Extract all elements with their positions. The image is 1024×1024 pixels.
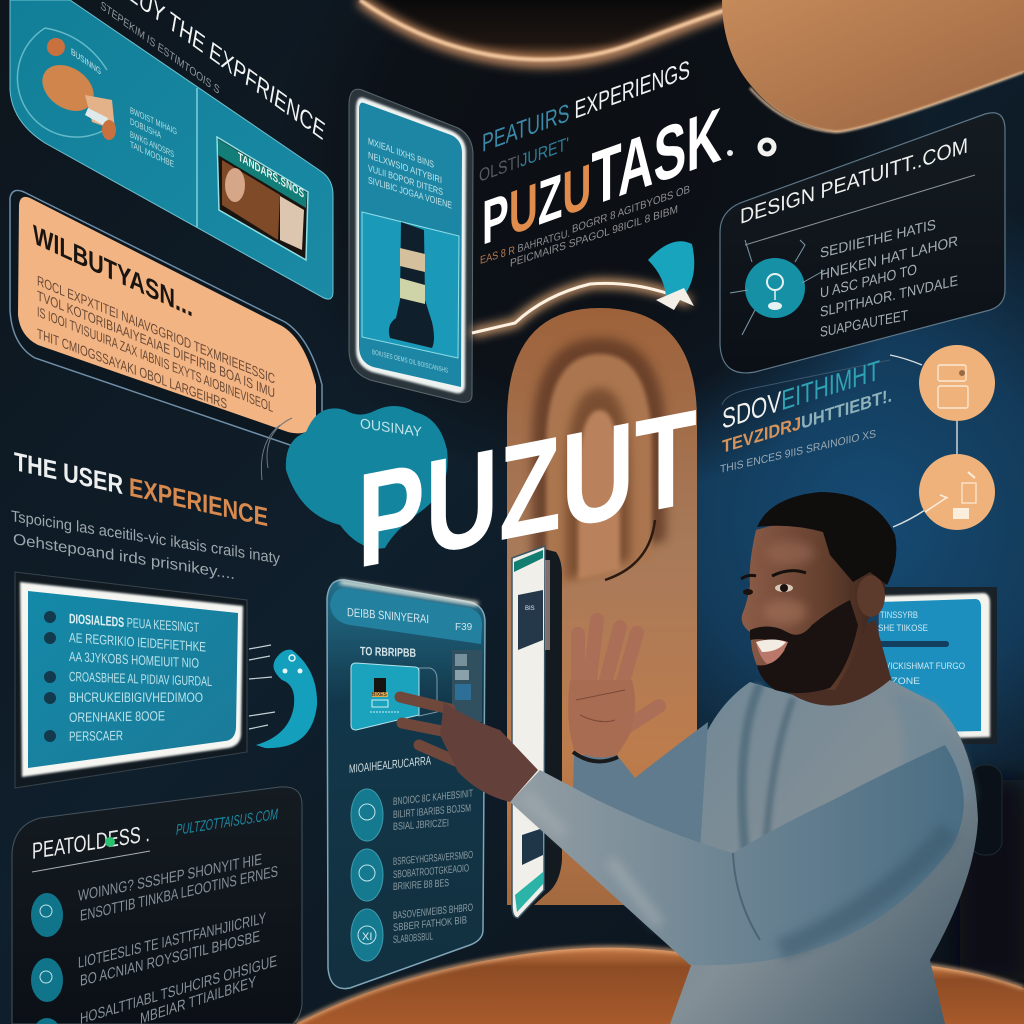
callout: sdov text block: TEVZIDRJUHTTIEBT!. [722, 384, 892, 457]
panel: features bottom card [12, 787, 302, 1024]
smile [756, 640, 788, 664]
icon: teal flag [648, 241, 694, 310]
heading: features experiences: OLSTIJURET' [479, 133, 569, 186]
ear [857, 575, 885, 617]
raised arm sleeve [573, 722, 708, 872]
card body: U ASC PAHO TO [820, 262, 917, 302]
tablet feature rows: BILIRT IBARIBS BOJSM [393, 802, 471, 821]
title subtext: EAS 8 R BAHRATGU. [480, 228, 570, 267]
icon: cards circle [919, 345, 995, 421]
pointing arm sleeve [510, 745, 964, 965]
screen text: RZONE [884, 676, 920, 687]
pointing hand [400, 697, 538, 802]
card text: MXIEAL IIXHS BINS [368, 136, 434, 171]
ring marker [760, 140, 774, 154]
icon: teal diagram [730, 240, 825, 335]
card rows: LIOTEESLIS TE IASTTFANHJIICRILY [78, 910, 266, 972]
hair [757, 492, 896, 585]
tablet feature rows [351, 788, 473, 961]
panel: tablet: TO RBRIPBB [360, 644, 416, 660]
tablet feature rows: XI [362, 931, 372, 943]
callout: sdov text block: SDOVEITHIMHT [722, 355, 880, 436]
panel: tablet [327, 580, 485, 989]
card text: NELXWSIO AITYBIRI [368, 150, 442, 186]
inner product card [362, 212, 459, 358]
bullet list: CROASBHEE AL PIDIAV IGURDAL [69, 669, 212, 689]
panel text: BWKG ANOSRS [130, 129, 174, 160]
right teal info screen [878, 587, 1002, 855]
card body: HNEKEN HAT LAHOR [820, 234, 958, 284]
tablet feature rows: BSIAL JBRICZEI [393, 817, 449, 833]
callout: sdov text block: THIS ENCES 9IIS SRAINOIIO XS [720, 428, 876, 476]
panel: tablet: F39 [455, 622, 473, 633]
title subtext [480, 184, 690, 270]
panel: tablet: MIOAIHEALRUCARRA [349, 753, 431, 776]
floor glow platforms [296, 948, 1024, 1024]
title subtext: PEICMAIRS SPAGOL 98ICIL 8 BIBM [510, 204, 678, 270]
bullet list: AE REGRIKIO IEIDEFIETHKE [69, 630, 206, 655]
tablet header: DEIBB SNINYERAI [347, 605, 429, 626]
card heading: WILBUTYASN... [33, 219, 193, 324]
card body: ROCL EXPXTITEI NAIAVGGRIOD TEXMRIEEESSIC [37, 273, 275, 388]
beard [750, 600, 858, 693]
tablet selected product card [351, 663, 437, 730]
bullet list: ORENHAKIE 8OOE [69, 708, 165, 725]
heading: features experiences [479, 56, 690, 186]
card body [37, 273, 275, 416]
raised hand [568, 620, 659, 761]
tablet feature rows: BSRGEYHGRSAVERSMBO [393, 849, 473, 868]
card body: THIT CMIOGSSAYAKI OBOL LARGEIHRS [37, 326, 227, 413]
bullet list: DIOSIALEDS PEUA KEESINGT [69, 611, 199, 635]
screen text: AVICKISHMAT FURGO [880, 661, 965, 672]
tablet feature rows: SBBER FATHOK BIB [393, 914, 467, 934]
top right copper panel [722, 0, 1024, 132]
photo thumbnail [217, 137, 308, 260]
callout: sdov text block [720, 355, 892, 476]
card text: SIVLIBIC JOGAA VOIENE [368, 175, 452, 212]
top ceiling glow curve [360, 0, 755, 62]
panel: orange message card [10, 190, 322, 445]
photo thumbnail: TANDARS.SNOS [238, 149, 304, 201]
card rows: ENSOTTIB TINKBA LEOOTINS ERNES [80, 863, 278, 925]
man presenting [400, 492, 978, 1024]
panel: enjoy the experience teal card [10, 0, 333, 299]
panel: design features card [720, 113, 1005, 373]
title: PUZUT: PUZUT [357, 381, 697, 597]
panel text: DOBUSHA [130, 116, 161, 142]
teal cloud badge: OUSINAY [360, 415, 423, 440]
card heading: PEATOLDESS . [32, 820, 150, 864]
right peach circle icons [890, 345, 995, 530]
section description: Tspoicing las aceitils-vic ikasis crails inaty [11, 508, 280, 568]
card text: VULII BOPOR DITERS [368, 163, 443, 198]
arrow: glowing wave line [472, 283, 690, 333]
tablet thumbnails [452, 650, 482, 722]
tablet feature rows: BRIKIRE B8 BES [393, 877, 449, 893]
bullet list: AA 3JYKOBS HOMEIUIT NIO [69, 649, 199, 671]
heading: the user experience: THE USER EXPERIENCE [14, 446, 268, 532]
panel: narrow upright phone [512, 546, 562, 918]
icon: teal speech comma with motion lines [249, 645, 317, 748]
screen text: SHE TIIKOSE [878, 623, 928, 634]
title: PUZUTASK: PUZUTASK [482, 91, 722, 261]
heading: enjoy the experience [100, 0, 327, 146]
panel text [130, 105, 177, 170]
copper arch [507, 308, 697, 905]
card body: SLPITHAOR. TNVDALE [820, 273, 958, 321]
card body: TVOL KOTORIBIAAIYEAIAE DIFFIRIB BOA IS IMU [37, 288, 275, 402]
head and face [742, 520, 885, 690]
tablet selected product card: BIXES [372, 692, 387, 698]
tablet feature rows: BNOIOC 8C KAHEBSINIT [393, 788, 473, 808]
tablet feature rows: SLABOBSBUL [393, 931, 433, 946]
bullet list: PERSCAER [69, 728, 123, 744]
icon: tools circle [919, 454, 995, 530]
card rows: WOINNG? SSSHEP SHONYIT HIE [78, 851, 262, 905]
screen text: TINSSYRB [880, 610, 918, 621]
sweater torso [670, 680, 978, 1024]
tablet feature rows: BASOVENMEIBS BHBRO [393, 902, 473, 922]
card body [820, 217, 958, 341]
panel text: TAIL MOOHBE [130, 139, 174, 170]
heading: the user experience [11, 446, 280, 583]
section description: Oehstepoand irds prisnikey.... [13, 531, 235, 583]
teal cloud badge [261, 406, 448, 549]
neck [790, 620, 892, 709]
panel: tall phone card [349, 89, 473, 402]
panel text: BWOIST MIHAIG [130, 105, 177, 138]
heading: features experiences: PEATUIRS EXPERIENGS [482, 56, 690, 158]
heading: enjoy the experience: STEPEKIM IS ESTIMTOOIS S [100, 0, 221, 97]
bullet list: BHCRUKEIBIGIVHEDIMOO [69, 690, 203, 705]
panel: features bottom card: PULTZOTTAISUS.COM [176, 806, 278, 839]
card rows: BO ACNIAN ROYSGITIL BHOSBE [80, 928, 260, 990]
face highlights [763, 541, 814, 625]
screen text [878, 610, 965, 687]
card footnote: BOIUSES OEMS OIL BOISCANSHS [372, 348, 448, 375]
eyes and brows [741, 571, 806, 595]
panel: narrow upright phone: BIS [525, 606, 535, 612]
tablet feature rows: SBOBATROOTGKEAOIO [393, 862, 469, 881]
illustration: person in circle: BUSINNG [71, 47, 101, 78]
card heading: DESIGN PEATUITT..COM [740, 134, 968, 229]
title subtext: BOGRR 8 AGITBYOBS OB [572, 184, 690, 236]
card text [368, 136, 452, 212]
card body: IS IOOI TVISUUIRA ZAX IABNIS EXYTS AIOBINEVISEOL [37, 304, 273, 416]
illustration: person in circle [17, 28, 116, 140]
card body: SUAPGAUTEET [820, 308, 908, 341]
card body: SEDIIETHE HATIS [820, 217, 936, 262]
bullet list [44, 611, 212, 744]
card rows [31, 851, 278, 1024]
panel: left glowing screen [15, 572, 247, 788]
